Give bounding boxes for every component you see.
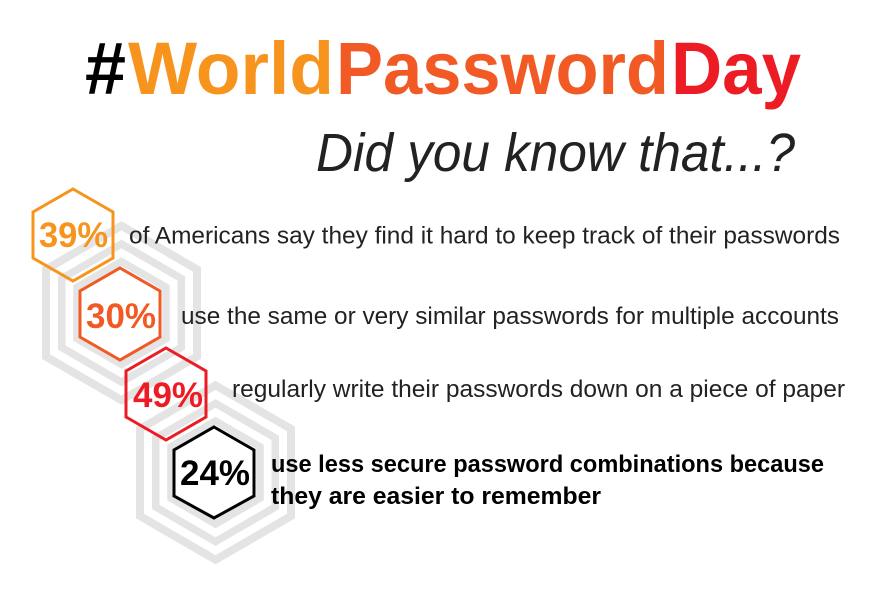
background hexagon pattern: lower	[140, 385, 291, 560]
value 39%: 39%	[39, 215, 108, 255]
title: Day	[671, 27, 801, 110]
description 24%: use less secure password combinations because	[271, 451, 824, 478]
title	[85, 27, 801, 110]
description 39%: of Americans say they find it hard to keep track of their passwords	[129, 222, 840, 250]
description 24%: they are easier to remember	[271, 483, 601, 510]
hexagon badge 49%	[126, 348, 206, 440]
stat 39%	[33, 189, 840, 281]
title: #	[85, 27, 126, 110]
hexagon badge 39%	[33, 189, 113, 281]
title: World	[128, 27, 334, 110]
hexagon badge 30%	[80, 268, 160, 360]
hexagon badge 24%	[174, 427, 254, 518]
stat 24%	[174, 427, 824, 518]
subtitle: Did you know that...?	[316, 123, 795, 183]
value 30%: 30%	[86, 296, 156, 336]
background hexagon pattern: upper	[46, 226, 197, 400]
value 49%: 49%	[133, 375, 203, 415]
description 24%	[271, 451, 824, 510]
description 30%: use the same or very similar passwords for multiple accounts	[181, 303, 839, 330]
title: Password	[336, 27, 669, 110]
stat 49%	[126, 348, 845, 440]
stat 30%	[80, 268, 839, 360]
value 24%: 24%	[180, 453, 250, 493]
description 49%: regularly write their passwords down on a piece of paper	[232, 376, 845, 403]
